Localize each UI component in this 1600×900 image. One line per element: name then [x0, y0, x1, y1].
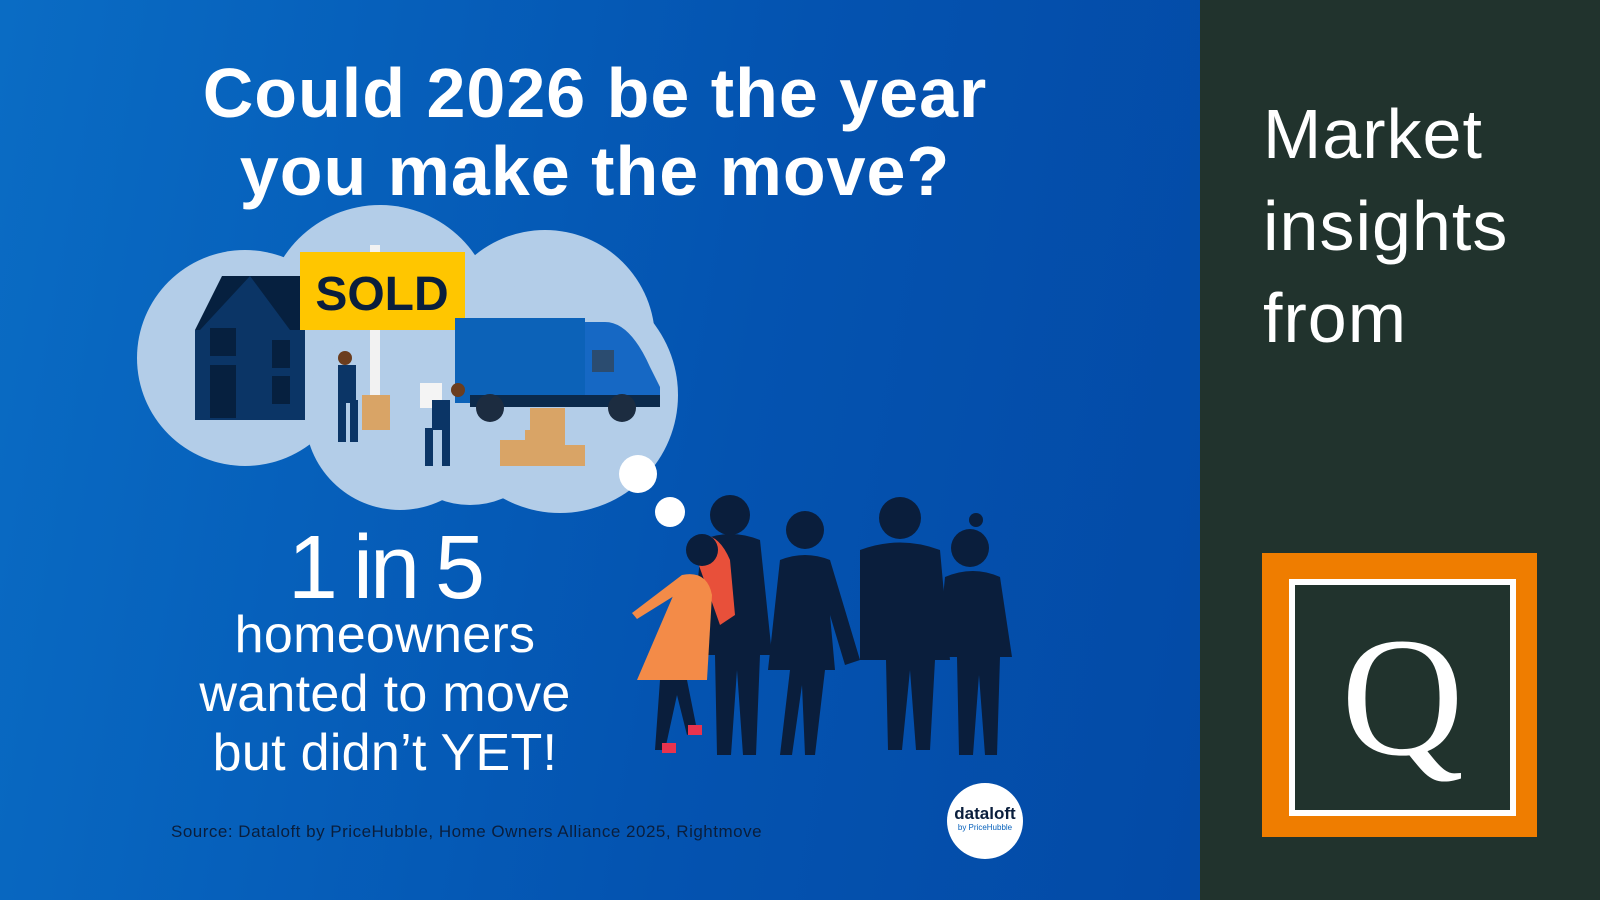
- illustration: thought cloud: [137, 205, 1012, 755]
- heading: market insights from: insights: [1263, 187, 1508, 265]
- logo: Q: Q: [1341, 603, 1464, 791]
- icon: sold sign: SOLD: [315, 268, 449, 321]
- stat: 1 in 5: 1 in 5: [288, 518, 482, 618]
- icon: sold sign: [300, 245, 465, 395]
- illustration: people silhouettes: [690, 495, 1012, 755]
- heading: market insights from: from: [1263, 279, 1407, 357]
- logo: dataloft: [947, 783, 1023, 859]
- text block: homeowners: but didn’t YET!: [213, 724, 557, 782]
- title: Could 2026 be the year: [203, 54, 987, 132]
- thought bubbles: [619, 455, 657, 493]
- logo: Q: [1262, 553, 1537, 837]
- icon: van: [455, 318, 660, 422]
- source: Source: Dataloft by PriceHubble, Home Owners Alliance 2025, Rightmove: [171, 822, 762, 841]
- text block: homeowners: wanted to move: [199, 665, 571, 723]
- text block: homeowners: homeowners: [235, 606, 535, 664]
- logo: dataloft: dataloft: [954, 804, 1016, 823]
- heading: market insights from: [1263, 95, 1508, 357]
- panel: blue main: [0, 0, 1200, 900]
- logo: dataloft: by PriceHubble: [958, 823, 1012, 832]
- icon: movers: [338, 351, 465, 466]
- title: you make the move?: [240, 132, 950, 210]
- text block: homeowners: [199, 606, 571, 782]
- heading: market insights from: Market: [1263, 95, 1483, 173]
- panel: right dark: [1200, 0, 1600, 900]
- icon: boxes: [500, 408, 585, 466]
- illustration: woman in orange: [632, 534, 735, 753]
- title: [203, 54, 987, 210]
- icon: house: [195, 276, 305, 420]
